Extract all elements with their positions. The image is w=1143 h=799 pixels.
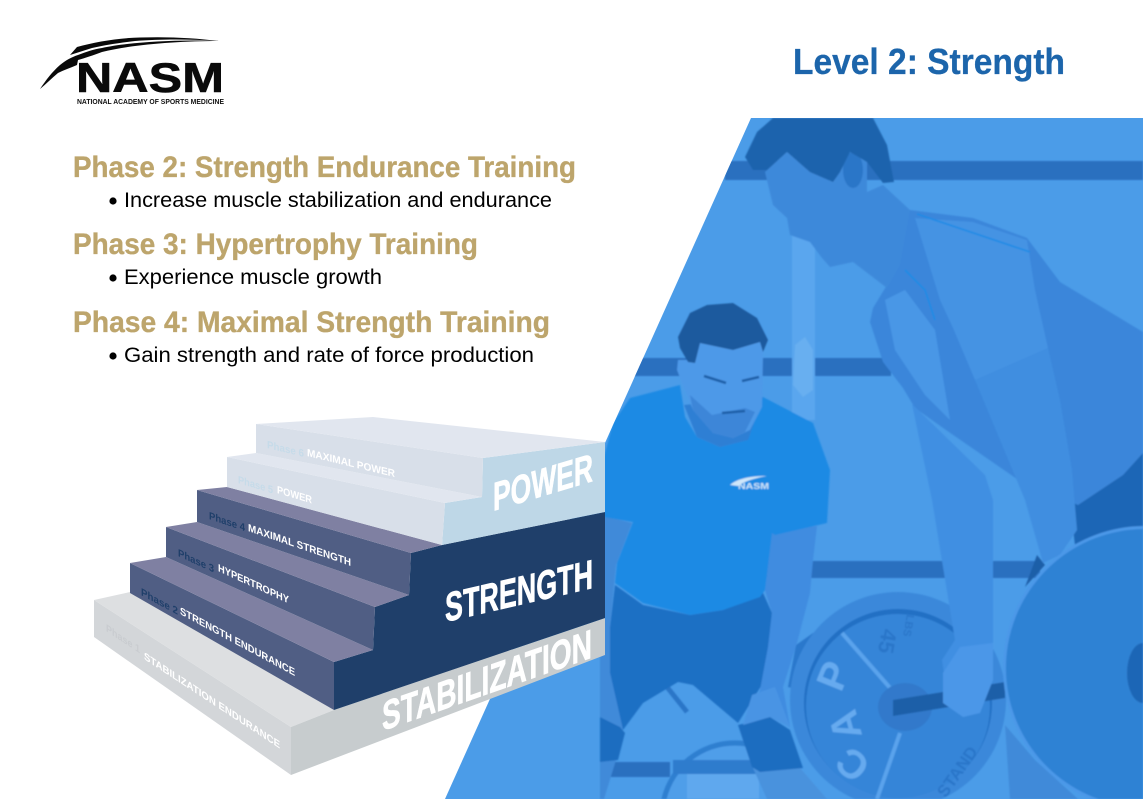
arm on knee <box>760 526 816 721</box>
person: standing lifter <box>745 118 1143 587</box>
face <box>677 342 763 438</box>
level: strength block <box>130 487 605 710</box>
sleeve <box>915 218 1048 380</box>
wheel in background <box>662 686 760 799</box>
person: kneeling trainer <box>600 303 830 799</box>
stubble shade <box>690 395 755 438</box>
step label: phase 2: Phase 2 <box>141 587 178 618</box>
wall pipe <box>792 235 815 420</box>
heading: phase 4: Phase 4: Maximal Strength Training <box>73 306 550 339</box>
level label: power: POWER <box>493 445 593 520</box>
logo: NASM <box>40 37 224 106</box>
barbell plate: front <box>1003 526 1143 799</box>
level: power block <box>227 417 605 545</box>
shirt logo <box>730 476 769 491</box>
bullet: phase 3: Experience muscle growth <box>124 265 382 289</box>
plate lettering <box>809 614 982 799</box>
step label: maximal power: MAXIMAL POWER <box>307 447 395 480</box>
step label: hypertrophy: HYPERTROPHY <box>218 562 290 607</box>
level label: stabilization: STABILIZATION <box>382 621 592 740</box>
knee pads <box>738 717 803 772</box>
panel: blue training photo <box>445 118 1143 799</box>
level label: strength: STRENGTH <box>445 550 593 631</box>
step label: phase 1: Phase 1 <box>106 623 140 656</box>
skin: face and neck <box>765 152 910 288</box>
shins <box>600 760 616 799</box>
text block: phases <box>73 151 576 367</box>
logo wordmark: NASM <box>76 54 224 101</box>
plate lettering: P <box>809 655 859 697</box>
plate spokes <box>842 633 900 799</box>
title: Level 2: Strength <box>793 41 1065 82</box>
left arm <box>600 515 632 730</box>
icon: logo swoosh <box>40 37 219 89</box>
gym wall bars <box>600 161 1143 777</box>
step label: stabilization endurance: STABILIZATION ENDURANCE <box>144 651 280 752</box>
bullet: phase 4: Gain strength and rate of force production <box>124 343 534 367</box>
shorts <box>1073 453 1143 544</box>
back arm <box>1017 480 1078 562</box>
neck shade <box>684 404 752 447</box>
logo tagline: NATIONAL ACADEMY OF SPORTS MEDICINE <box>77 99 224 106</box>
hair <box>745 118 894 183</box>
hub <box>878 683 932 731</box>
plate lettering: A <box>821 705 871 745</box>
ear <box>843 152 863 188</box>
chest light <box>885 290 950 420</box>
step label: phase 5: Phase 5 <box>238 474 273 496</box>
torso shirt <box>870 210 1143 505</box>
step label: phase 6: Phase 6 <box>267 439 304 460</box>
right leg <box>1005 725 1078 799</box>
heading: phase 2: Phase 2: Strength Endurance Training <box>73 151 576 184</box>
step label: power: POWER <box>277 484 312 507</box>
level: stabilization base <box>94 592 605 775</box>
plate lettering: 45 <box>873 627 902 656</box>
shorts <box>610 585 772 730</box>
standing lifter: front arm and hand <box>912 404 993 717</box>
shirt <box>604 385 830 615</box>
shirt logo: NASM <box>738 482 769 491</box>
step label: phase 3: Phase 3 <box>178 547 214 575</box>
hand on knee <box>742 688 788 726</box>
plate lettering: C <box>828 738 878 790</box>
plate lettering: LBS <box>900 614 916 637</box>
step label: maximal strength: MAXIMAL STRENGTH <box>248 522 351 569</box>
heading: phase 3: Phase 3: Hypertrophy Training <box>73 228 478 261</box>
hair <box>678 303 768 363</box>
bullet: phase 2: Increase muscle stabilization and endurance <box>124 188 552 212</box>
step label: strength endurance: STRENGTH ENDURANCE <box>180 606 295 679</box>
chart: training pyramid <box>94 417 605 775</box>
barbell plate: rear <box>790 592 1006 799</box>
step label: phase 4: Phase 4 <box>209 510 245 534</box>
